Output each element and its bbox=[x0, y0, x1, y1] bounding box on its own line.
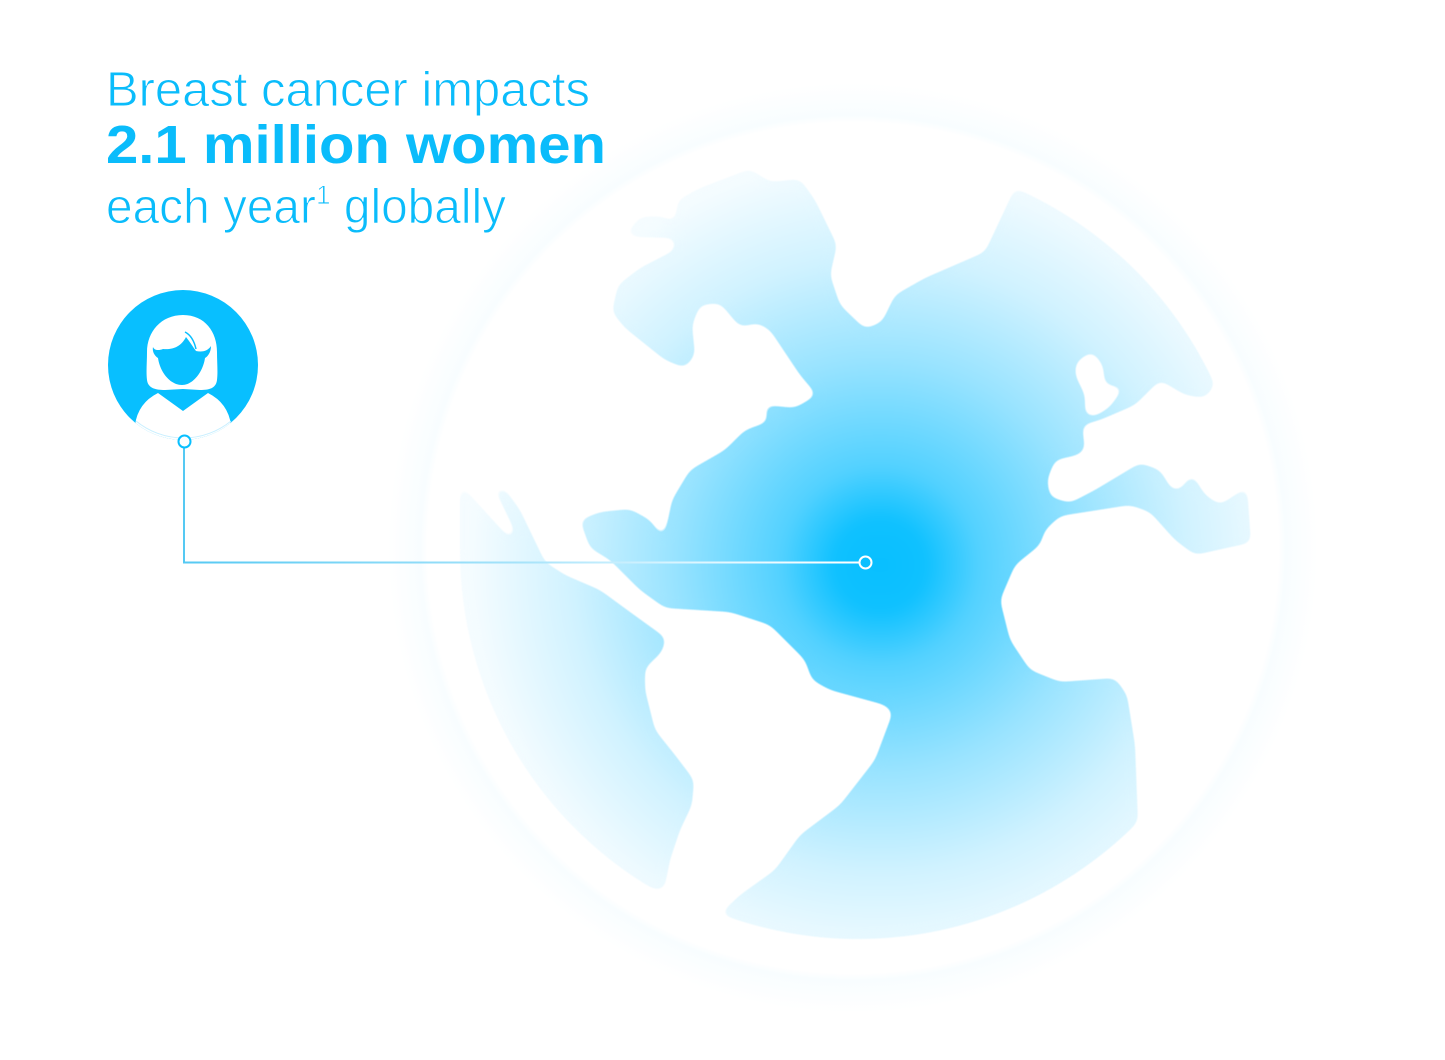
globe bbox=[460, 169, 1251, 939]
title line 2: highlighted figure: 2.1 million women bbox=[106, 115, 606, 175]
title line 3: 1 bbox=[316, 180, 331, 210]
avatar face bbox=[153, 337, 211, 385]
title bbox=[106, 63, 606, 234]
avatar hair strand bbox=[185, 332, 196, 349]
connector start node bbox=[178, 436, 190, 448]
ocean: Pacific bbox=[460, 484, 694, 890]
land: British Isles bbox=[1075, 351, 1124, 416]
title line 3: globally bbox=[331, 180, 506, 234]
globe halo bbox=[388, 83, 1318, 1013]
title line 3: each year bbox=[106, 180, 321, 234]
icon: woman avatar bbox=[108, 290, 258, 445]
title line 1: Breast cancer impacts bbox=[106, 63, 590, 117]
connector line bbox=[184, 447, 859, 562]
ocean: Atlantic and northern seas bbox=[580, 169, 1251, 939]
avatar body bbox=[135, 393, 230, 440]
avatar hair bbox=[147, 315, 217, 390]
connector end node bbox=[860, 556, 872, 568]
